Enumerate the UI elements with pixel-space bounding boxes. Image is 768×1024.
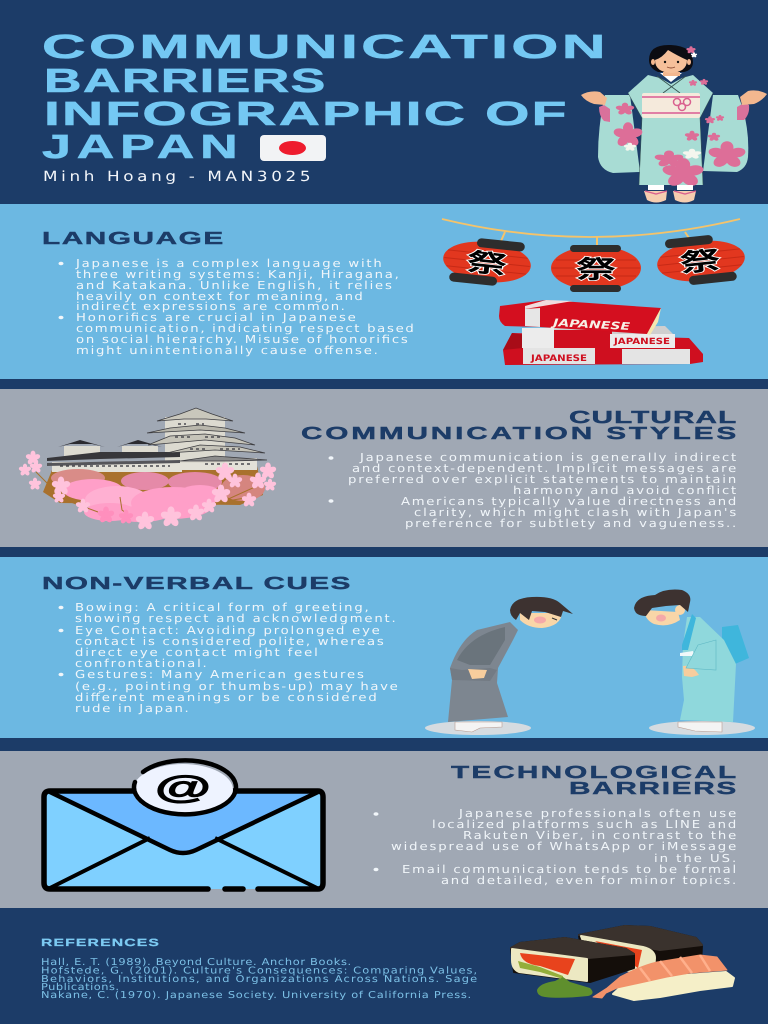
divider band: language to culture [0, 379, 768, 389]
culture bullet text [328, 451, 737, 530]
technology bullet text: Japanese professionals often use [458, 807, 736, 820]
illustration: stack of Japanese books [499, 300, 703, 365]
non-verbal bullet text: (e.g., pointing or thumbs-up) may have [75, 680, 398, 693]
technology bullet text: and detailed, even for minor topics. [441, 874, 736, 887]
culture bullet text: harmony and avoid conflict [513, 484, 737, 497]
references list: Publications. [41, 982, 119, 993]
language heading: LANGUAGE [42, 228, 223, 248]
divider band: culture to non-verbal [0, 547, 768, 557]
panel: cultural communication styles [0, 389, 768, 547]
non-verbal bullet text [58, 601, 398, 715]
references heading: REFERENCES [41, 937, 159, 949]
references list: Behaviors, Institutions, and Organizations Across Nations. Sage [41, 974, 477, 985]
illustration: red lanterns on a string: 祭 [465, 242, 509, 282]
illustration: castle with cherry blossoms [18, 408, 277, 531]
references list: Hall, E. T. (1989). Beyond Culture. Anchor Books. [41, 957, 351, 968]
language bullet text: indirect expressions are common. [76, 300, 345, 313]
language background [0, 204, 768, 379]
non-verbal bullet text: confrontational. [75, 657, 207, 670]
illustration: bowing man [425, 597, 573, 735]
culture bullet text: and context-dependent. Implicit messages are [352, 462, 736, 475]
title: JAPAN [42, 129, 238, 166]
language bullet text: Honorifics are crucial in Japanese [76, 311, 356, 324]
technology heading: TECHNOLOGICAL [451, 762, 737, 782]
illustration: red lanterns on a string: 祭 [576, 250, 616, 286]
language bullet text: and Katakana. Unlike English, it relies [76, 279, 392, 292]
references list: Nakane, C. (1970). Japanese Society. University of California Press. [41, 990, 471, 1001]
non-verbal bullet text: direct eye contact might feel [75, 646, 318, 659]
illustration: stack of Japanese books: JAPANESE [613, 337, 670, 347]
technology background [0, 751, 768, 908]
title: INFOGRAPHIC OF [44, 96, 566, 133]
culture bullet text: preferred over explicit statements to maintain [348, 473, 736, 486]
language bullet text: might unintentionally cause offense. [76, 344, 378, 357]
technology bullet text: Rakuten Viber, in contrast to the [463, 829, 736, 842]
culture heading: CULTURAL [569, 407, 737, 427]
icon: Japanese flag [260, 135, 326, 161]
non-verbal background [0, 557, 768, 738]
technology bullet text: in the US. [654, 852, 736, 865]
culture bullet text: preference for subtlety and vagueness.. [405, 517, 736, 530]
non-verbal bullet text: contact is considered polite, whereas [75, 635, 384, 648]
technology bullet text: Email communication tends to be formal [402, 863, 736, 876]
title: BARRIERS [44, 63, 325, 100]
panel: technological barriers [0, 751, 768, 908]
header panel [42, 29, 767, 202]
language bullet text: on social hierarchy. Misuse of honorifics [76, 333, 408, 346]
culture heading [301, 407, 737, 443]
non-verbal bullet text: rude in Japan. [75, 702, 189, 715]
illustration: woman in kimono [581, 45, 767, 202]
non-verbal bullet text: Bowing: A critical form of greeting, [75, 601, 369, 614]
illustration: stack of Japanese books: JAPANESE [550, 317, 631, 333]
culture heading: COMMUNICATION STYLES [301, 423, 736, 443]
technology bullet text: localized platforms such as LINE and [432, 818, 736, 831]
non-verbal bullet text: Eye Contact: Avoiding prolonged eye [75, 624, 380, 637]
culture bullet text: Americans typically value directness and [401, 495, 736, 508]
panel: references [41, 926, 734, 1001]
language bullet text: communication, indicating respect based [76, 322, 414, 335]
technology heading [451, 762, 737, 798]
references list [41, 957, 477, 1001]
language bullet text [58, 257, 414, 357]
icon: email envelope with at sign: @ [155, 769, 211, 805]
technology heading: BARRIERS [569, 778, 736, 798]
technology bullet text: widespread use of WhatsApp or iMessage [391, 840, 736, 853]
culture bullet text: clarity, which might clash with Japan's [414, 506, 737, 519]
technology bullet text [374, 807, 736, 887]
illustration: stack of Japanese books: JAPANESE [530, 354, 587, 364]
title: COMMUNICATION [42, 29, 605, 66]
culture background [0, 389, 768, 547]
non-verbal bullet text: showing respect and acknowledgment. [75, 612, 396, 625]
author line: Minh Hoang - MAN3025 [43, 169, 311, 185]
non-verbal bullet text: different meanings or be considered [75, 691, 377, 704]
language bullet text: heavily on context for meaning, and [76, 290, 363, 303]
illustration: sushi rolls and nigiri [511, 926, 734, 1000]
illustration: red lanterns on a string: 祭 [678, 240, 722, 280]
divider band: non-verbal to technology [0, 738, 768, 751]
icon: email envelope with at sign [44, 760, 323, 889]
language bullet text: three writing systems: Kanji, Hiragana, [76, 268, 399, 281]
illustration: red lanterns on a string [441, 219, 747, 292]
panel: language [0, 204, 768, 379]
culture bullet text: Japanese communication is generally indirect [359, 451, 737, 464]
panel: non-verbal cues [0, 557, 768, 738]
title [42, 29, 605, 166]
non-verbal bullet text: Gestures: Many American gestures [75, 668, 364, 681]
non-verbal heading: NON-VERBAL CUES [42, 573, 350, 593]
references list: Hofstede, G. (2001). Culture's Consequences: Comparing Values, [41, 966, 477, 976]
illustration: bowing woman [634, 590, 755, 735]
language bullet text: Japanese is a complex language with [75, 257, 382, 270]
